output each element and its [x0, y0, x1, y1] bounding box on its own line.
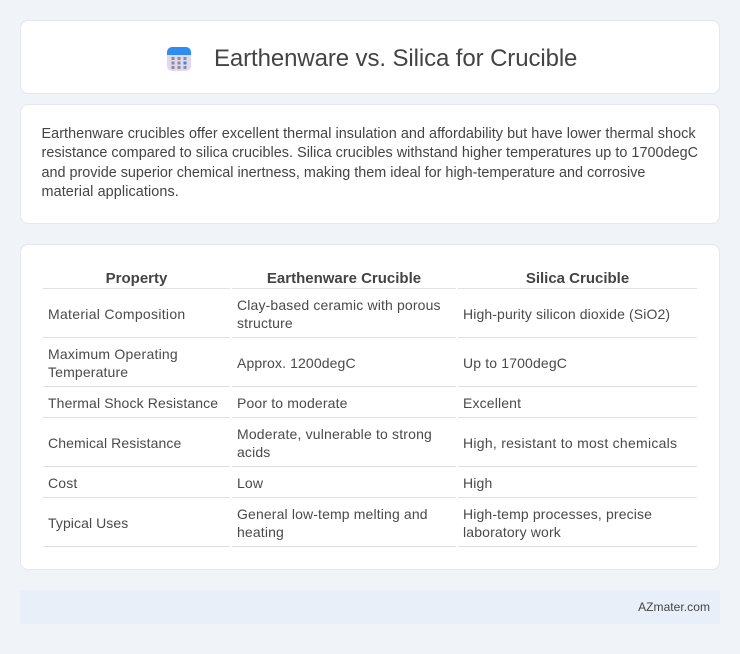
row: chemical resistance: acids — [237, 444, 270, 460]
row: thermal shock resistance: Poor to moderate — [237, 395, 348, 411]
row: material composition: structure — [237, 315, 293, 331]
title: Earthenware vs. Silica for Crucible — [214, 45, 577, 72]
row: chemical resistance: Chemical Resistance — [48, 435, 181, 451]
comparison table panel — [20, 244, 720, 570]
row: typical uses: High-temp processes, precise — [463, 506, 652, 522]
row: cost: Low — [237, 475, 263, 491]
icon: calendar — [167, 47, 191, 71]
intro paragraph: resistance compared to silica crucibles. Silica crucibles withstand higher temperatures up to 1700degC — [42, 145, 698, 161]
intro paragraph: material applications. — [42, 184, 179, 200]
table header: Silica Crucible — [526, 270, 629, 287]
row: maximum operating temperature: Temperature — [48, 364, 128, 380]
table header — [43, 270, 697, 289]
row: typical uses: Typical Uses — [48, 515, 128, 531]
row: material composition: High-purity silicon dioxide (SiO2) — [463, 306, 670, 322]
intro paragraph: Earthenware crucibles offer excellent thermal insulation and affordability but have lower thermal shock — [42, 126, 696, 142]
intro paragraph — [42, 126, 698, 200]
row: material composition — [43, 297, 697, 338]
row: typical uses: heating — [237, 524, 284, 540]
intro paragraph: and provide superior chemical inertness, making them ideal for high-temperature and corrosive — [42, 165, 645, 181]
footer bar — [20, 590, 720, 624]
row: cost — [43, 475, 697, 498]
row: maximum operating temperature: Maximum Operating — [48, 346, 178, 362]
row: cost: Cost — [48, 475, 77, 491]
row: thermal shock resistance: Thermal Shock Resistance — [48, 395, 218, 411]
footer credit: AZmater.com — [638, 600, 710, 614]
row: chemical resistance — [43, 426, 697, 467]
row: chemical resistance: High, resistant to most chemicals — [463, 435, 677, 451]
header panel — [20, 20, 720, 94]
row: maximum operating temperature: Up to 1700degC — [463, 355, 567, 371]
row: cost: High — [463, 475, 492, 491]
table header: Property — [106, 270, 167, 287]
row: material composition: Material Composition — [48, 306, 186, 322]
row: typical uses: General low-temp melting and — [237, 506, 428, 522]
row: thermal shock resistance: Excellent — [463, 395, 521, 411]
table header: Earthenware Crucible — [267, 270, 421, 287]
row: thermal shock resistance — [43, 395, 697, 418]
row: chemical resistance: Moderate, vulnerable to strong — [237, 426, 432, 442]
row: typical uses: laboratory work — [463, 524, 561, 540]
row: maximum operating temperature — [43, 346, 697, 387]
row: material composition: Clay-based ceramic with porous — [237, 297, 441, 313]
row: typical uses — [43, 506, 697, 547]
row: maximum operating temperature: Approx. 1200degC — [237, 355, 356, 371]
intro text panel — [20, 104, 720, 224]
